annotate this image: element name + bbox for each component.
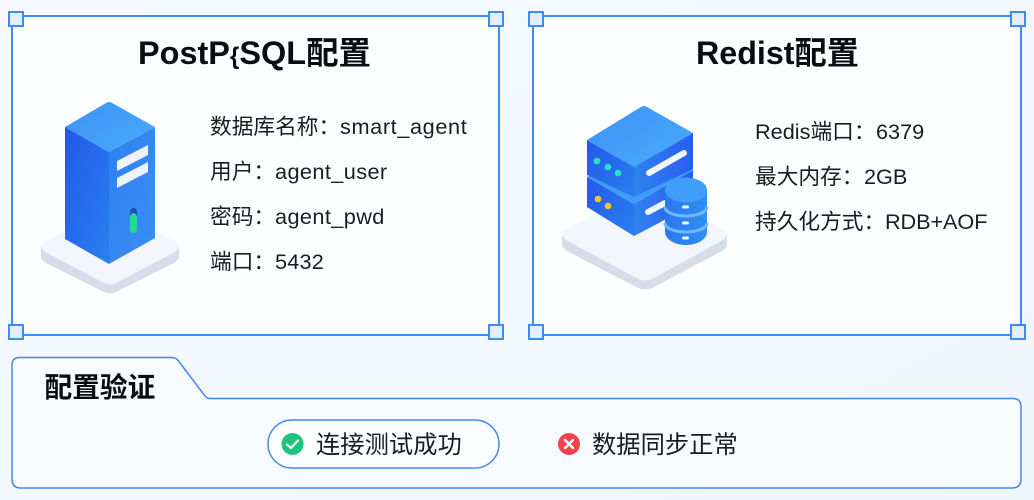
text: database fields — [210, 114, 467, 274]
text: database fields: smart_agent — [340, 114, 467, 139]
text: database fields: 密码： — [210, 204, 275, 229]
panel: Redis config — [529, 12, 1025, 339]
text: Redis fields — [755, 119, 987, 234]
text: database fields: 数据库名称： — [210, 114, 340, 139]
text: Redis fields: 持久化方式： — [755, 209, 885, 234]
text: Redis fields: RDB+AOF — [885, 209, 987, 234]
text: Redis fields: 最大内存： — [755, 164, 863, 189]
status: connection test success — [268, 420, 499, 468]
text: Redis fields: 2GB — [864, 164, 907, 189]
text: database fields: 5432 — [275, 249, 324, 274]
text: database fields: 用户： — [210, 159, 275, 184]
text: database fields: agent_user — [275, 159, 388, 184]
icon: server stack with database — [562, 106, 727, 290]
text: Redis fields: 6379 — [876, 119, 924, 144]
heading: validation: 配置验证 — [44, 372, 155, 403]
panel: config validation — [12, 358, 1021, 488]
heading: Redis: Redist配置 — [696, 35, 859, 71]
status: connection test success: 连接测试成功 — [316, 432, 462, 459]
status: data sync: 数据同步正常 — [592, 432, 738, 459]
upper unit — [587, 140, 634, 197]
text: database fields: agent_pwd — [275, 204, 385, 229]
panel: PostgreSQL config — [9, 12, 503, 339]
text: database fields: 端口： — [210, 249, 275, 274]
heading: PostgreSQL: PostP{SQL配置 — [138, 35, 371, 71]
lower unit — [587, 177, 634, 236]
database cylinder — [665, 190, 707, 245]
icon: server tower — [41, 102, 179, 294]
text: Redis fields: Redis端口： — [755, 119, 876, 144]
